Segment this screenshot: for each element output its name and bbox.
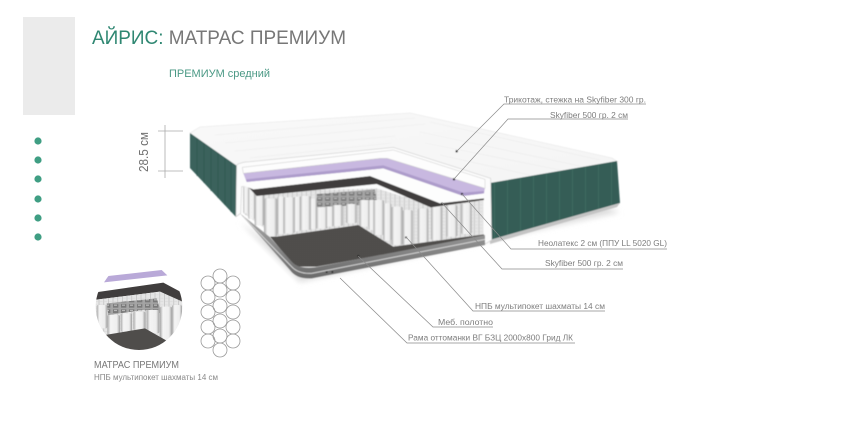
inset caption [94, 360, 218, 382]
leader anchor dots [357, 150, 463, 257]
cut interior, drawn in zoomed coordinates [236, 147, 492, 278]
lilac foam layer [243, 158, 485, 196]
ground shadow [240, 205, 620, 282]
callout: knit cover [457, 94, 646, 151]
callout: skyfiber bottom: Skyfiber 500 гр. 2 см [545, 258, 623, 268]
inset caption: НПБ мультипокет шахматы 14 см [94, 372, 218, 382]
dark layer above springs [243, 176, 484, 207]
spring layout diagram [201, 269, 240, 357]
inset spring block [93, 292, 185, 343]
inset: spring detail circle [96, 270, 182, 350]
right side panel [490, 161, 620, 240]
left spring wall [243, 187, 472, 245]
callout: ottoman frame: Рама оттоманки ВГ БЗЦ 2000х800 Грид ЛК [408, 332, 573, 342]
inset floor [106, 328, 166, 350]
inset spring columns [97, 305, 182, 340]
callout: pocket springs: НПБ мультипокет шахматы 14 см [475, 301, 605, 311]
ottoman frame [240, 213, 485, 278]
springs backing [243, 185, 483, 247]
inset caption: МАТРАС ПРЕМИУМ [94, 360, 179, 371]
sidebar placeholder panel [23, 17, 75, 115]
lower white foam layer [243, 168, 484, 203]
sidebar navigation dots [34, 137, 42, 241]
callout: furniture fabric [358, 256, 493, 327]
callout: knit cover: Трикотаж, стежка на Skyfiber 300 гр. [504, 94, 646, 104]
title: АЙРИС: МАТРАС ПРЕМИУМ [92, 25, 346, 49]
callout: neolatex: Неолатекс 2 см (ППУ LL 5020 GL) [538, 238, 667, 248]
right base edge [490, 203, 620, 244]
quilting lines [215, 118, 600, 175]
callout: skyfiber bottom [442, 203, 623, 269]
floor fabric [270, 225, 484, 267]
callout: neolatex [462, 194, 667, 249]
subtitle: ПРЕМИУМ средний [169, 68, 270, 80]
mattress top surface [190, 113, 618, 184]
infographic canvas [23, 17, 667, 382]
inset back springs [107, 298, 162, 315]
inset lilac layer [104, 270, 167, 282]
top white foam layer [242, 150, 485, 188]
callout: skyfiber top [454, 110, 628, 179]
white interior rim [236, 147, 492, 244]
height dimension [137, 125, 183, 178]
mattress cutaway illustration [190, 113, 620, 282]
back spring rows [317, 189, 378, 210]
height dimension: 28.5 см [137, 132, 151, 172]
callout: furniture fabric: Меб. полотно [438, 317, 493, 327]
left side panel [190, 133, 237, 217]
callout: pocket springs [406, 237, 605, 311]
callout: ottoman frame [340, 278, 575, 343]
frame rivets [326, 271, 333, 273]
inset dark layer [93, 283, 183, 303]
callout: skyfiber top: Skyfiber 500 гр. 2 см [550, 110, 628, 120]
